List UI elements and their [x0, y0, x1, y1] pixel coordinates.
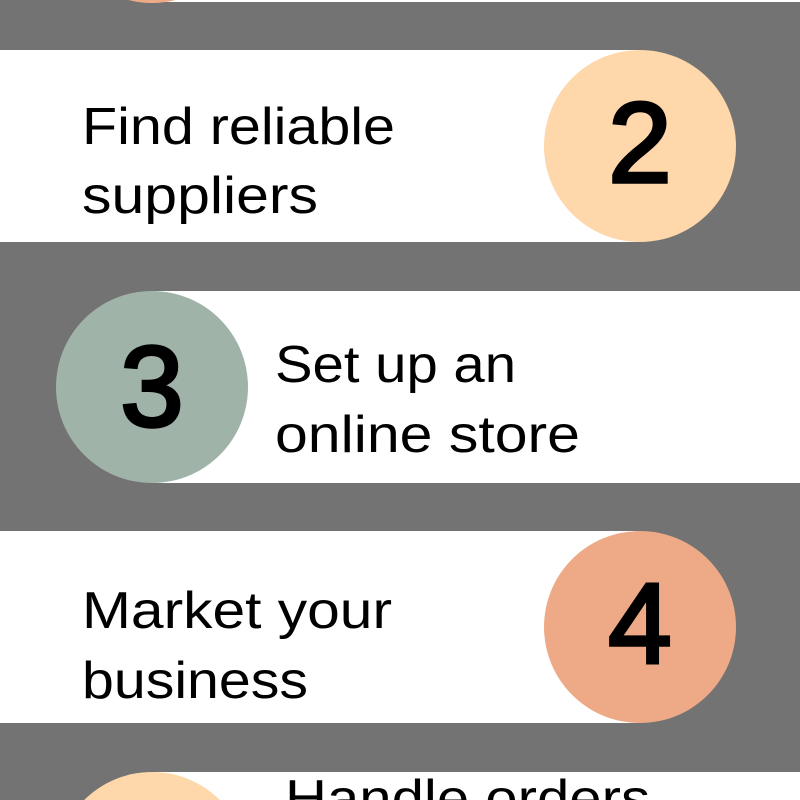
step 3 text [275, 336, 580, 464]
step 4 number circle [544, 531, 736, 723]
step 3 text: Set up an [275, 336, 516, 394]
step 4 row [0, 531, 736, 723]
step 2 number circle: 2 [608, 80, 672, 207]
step 4 text: Market your [82, 582, 392, 640]
step 5 band [152, 772, 800, 800]
step 5 number circle [84, 772, 220, 800]
step 3 row [56, 291, 800, 483]
step 3 number circle [56, 291, 248, 483]
step 1 row remnant [128, 0, 800, 3]
step 2 number circle [544, 50, 736, 242]
step 2 row [0, 50, 736, 242]
step 2 text: suppliers [82, 167, 318, 225]
step 5 row [84, 770, 800, 800]
step 3 text: online store [275, 406, 580, 464]
step 4 number circle: 4 [608, 561, 672, 688]
step 4 text [82, 582, 392, 710]
step 3 number circle: 3 [120, 324, 184, 451]
step 2 text: Find reliable [82, 98, 395, 156]
step 4 text: business [82, 652, 308, 710]
step 2 band [0, 50, 640, 242]
step 3 band [152, 291, 800, 483]
step 4 band [0, 531, 640, 723]
step 2 text [82, 98, 395, 225]
